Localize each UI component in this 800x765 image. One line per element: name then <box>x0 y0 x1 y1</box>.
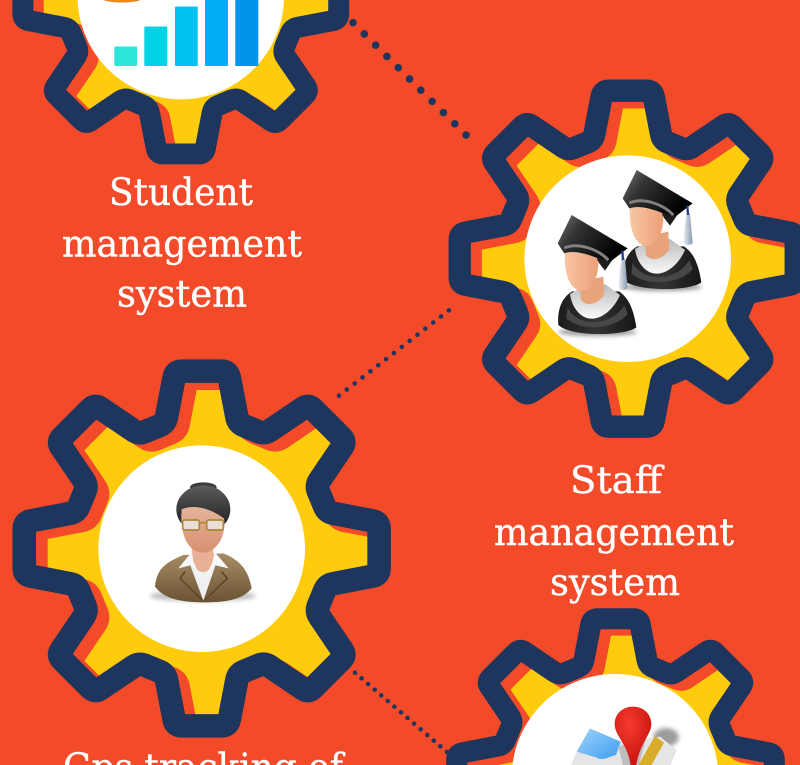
gear: staff <box>460 91 800 433</box>
gear: gps tracking <box>24 371 391 733</box>
white disc: gps tracking <box>98 445 305 652</box>
gear: map <box>457 619 785 765</box>
heading: student management system: Student <box>109 171 253 214</box>
white disc: staff <box>524 155 731 362</box>
dotted connector: gps tracking to map <box>355 673 447 752</box>
heading: staff management system: system <box>550 561 680 604</box>
dotted connector: student to staff <box>353 23 477 146</box>
icon: two graduates <box>558 170 702 336</box>
white disc: map <box>512 674 718 765</box>
icon: bar chart <box>103 0 258 66</box>
heading: staff management system: Staff <box>570 459 665 502</box>
heading: student management system <box>62 171 302 316</box>
white disc: student <box>78 0 284 99</box>
icon: map pin <box>570 707 679 765</box>
panel: staff management gear <box>460 91 800 433</box>
panel: student management gear <box>23 0 349 160</box>
heading: staff management system <box>494 459 734 604</box>
heading: staff management system: management <box>494 511 734 554</box>
panel: gps tracking gear <box>24 371 391 733</box>
heading: student management system: system <box>117 273 247 316</box>
icon: teacher with glasses <box>149 482 256 602</box>
gear: student <box>23 0 349 160</box>
heading: student management system: management <box>62 223 302 266</box>
panel: map gear <box>457 619 785 765</box>
dotted connector: staff to gps tracking <box>339 304 457 396</box>
